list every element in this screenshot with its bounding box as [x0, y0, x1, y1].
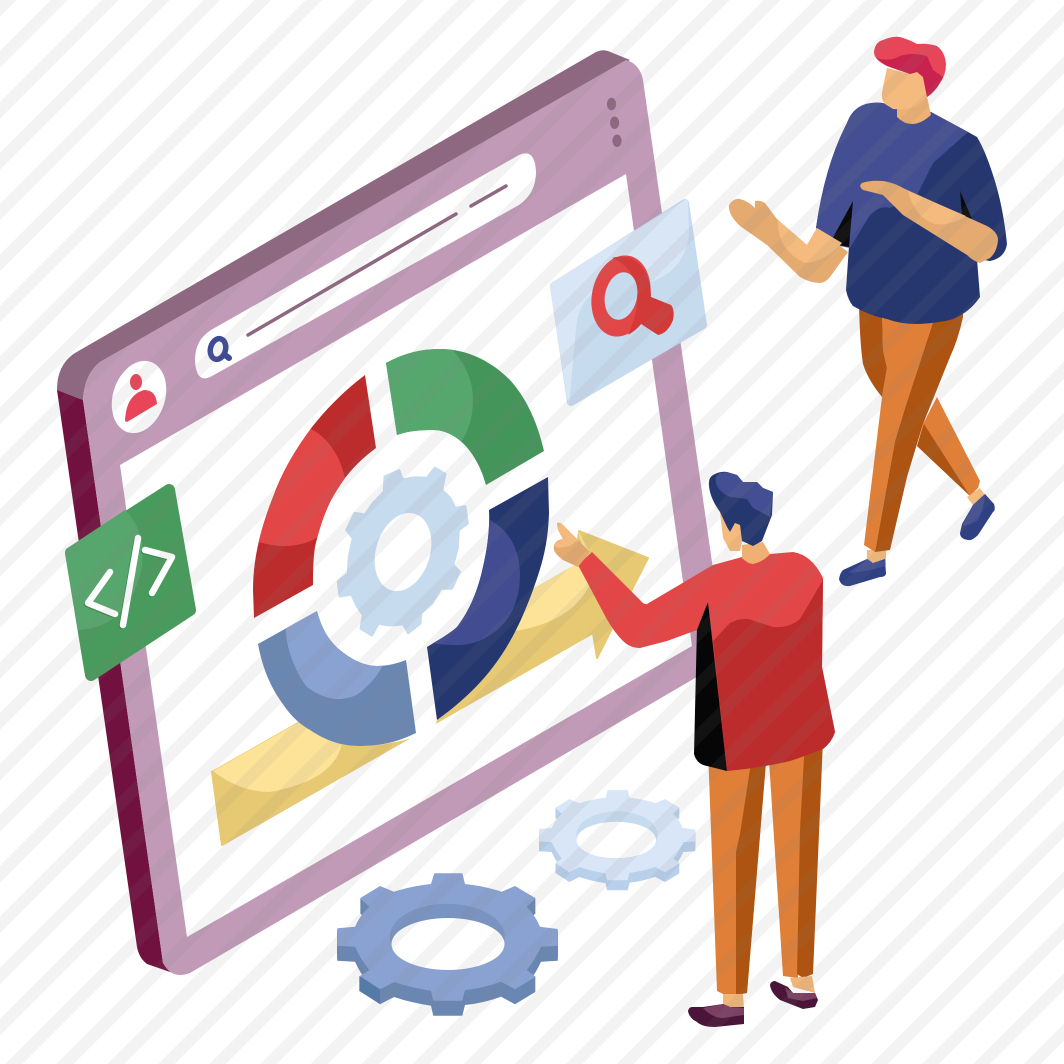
frame front face — [83, 60, 726, 975]
magnifier icon — [584, 250, 674, 342]
face — [720, 512, 742, 551]
front ankle — [867, 550, 886, 565]
navy segment — [425, 477, 549, 720]
blue t-shirt — [816, 103, 1007, 324]
back shoe — [960, 494, 995, 540]
frame top side — [57, 50, 630, 400]
walking man — [729, 37, 1007, 586]
front shoe — [688, 1004, 744, 1027]
front leg trousers — [859, 305, 963, 552]
large blue gear — [337, 873, 558, 1016]
donut backing — [253, 349, 549, 746]
center gear — [338, 468, 467, 635]
black shirt side — [694, 602, 727, 771]
front shoe — [839, 559, 886, 586]
red segment — [240, 375, 376, 618]
neck — [897, 97, 931, 124]
face — [882, 68, 927, 109]
code symbol icon — [87, 538, 172, 626]
bent arm across the chest — [860, 181, 998, 263]
navy hair — [709, 472, 773, 546]
growth arrow — [212, 531, 648, 845]
window menu dots — [607, 98, 622, 147]
green segment — [380, 340, 544, 485]
back shoe — [770, 981, 818, 1009]
red hair — [874, 37, 946, 97]
left arm and open hand — [729, 199, 848, 283]
red jumper — [578, 552, 835, 771]
neck — [742, 542, 770, 564]
user avatar icon — [103, 354, 175, 440]
browser window frame — [57, 50, 726, 975]
back leg — [917, 397, 985, 505]
right leg trousers — [768, 740, 823, 978]
window content area — [120, 174, 692, 937]
donut chart — [240, 340, 549, 746]
frame left side — [57, 390, 173, 973]
ankles — [723, 976, 815, 1008]
small light gear — [539, 790, 695, 890]
pointing man — [554, 472, 835, 1027]
code card — [65, 490, 190, 675]
search card — [550, 199, 703, 404]
blue segment — [258, 611, 416, 746]
left leg trousers — [708, 750, 767, 995]
search bar — [195, 153, 536, 378]
pointing hand — [554, 523, 590, 567]
